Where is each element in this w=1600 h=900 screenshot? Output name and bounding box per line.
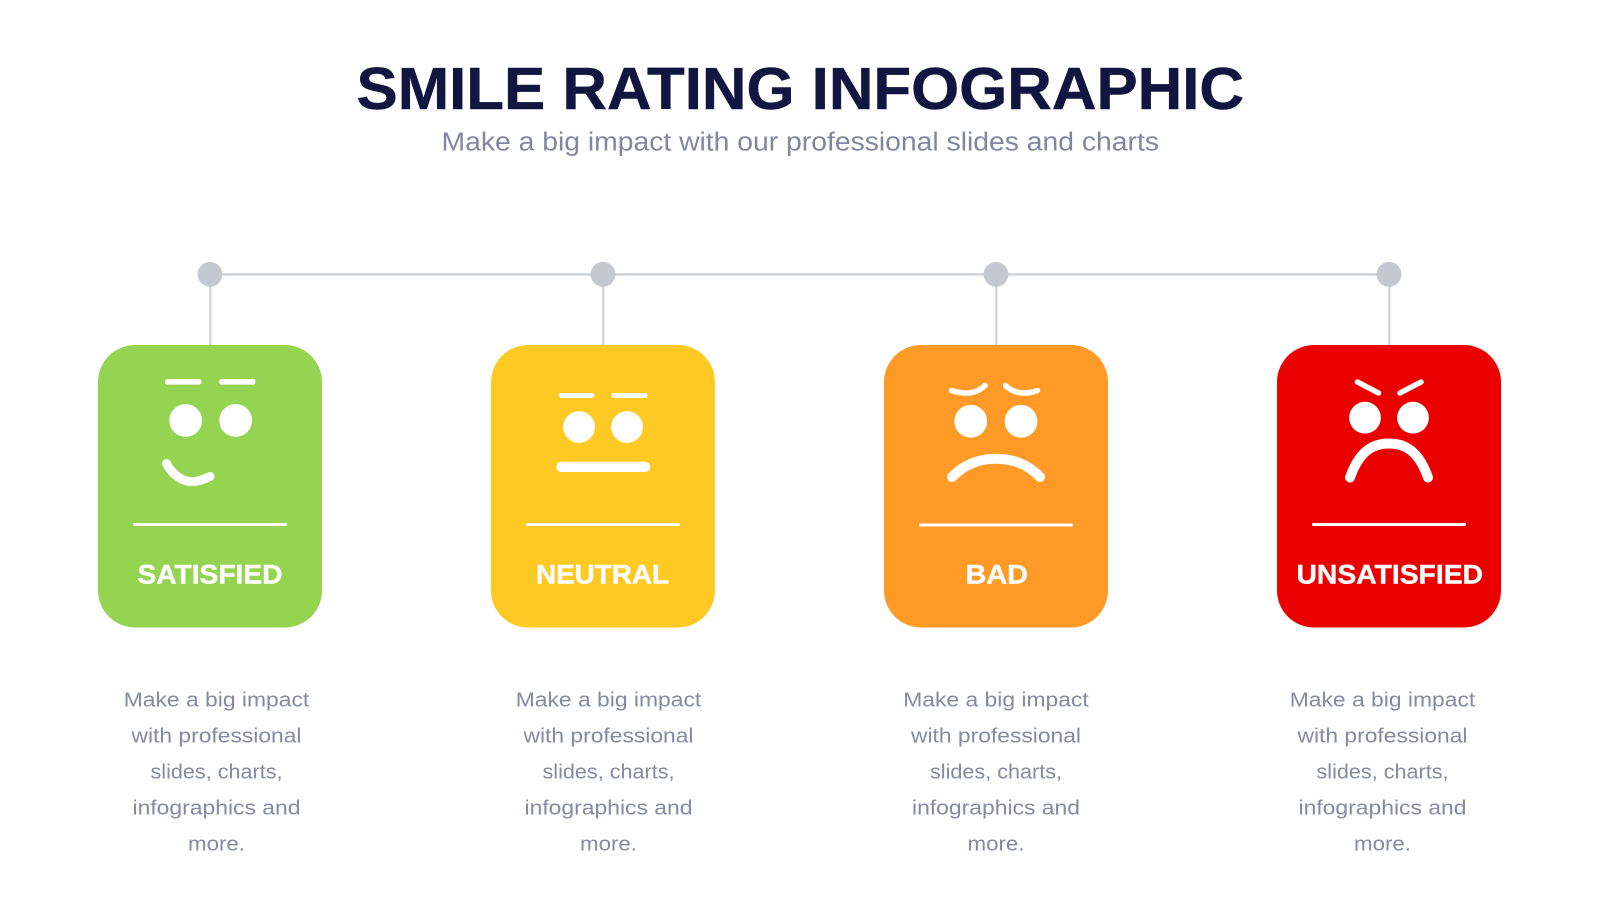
title: SMILE RATING INFOGRAPHIC <box>356 56 1244 122</box>
icon: neutral face <box>556 393 650 472</box>
text block: neutral: more. <box>580 832 637 856</box>
text block: neutral: slides, charts, <box>542 760 674 784</box>
icon: satisfied face <box>165 379 256 482</box>
timeline connector <box>198 262 1401 345</box>
text block: bad: Make a big impact <box>903 688 1089 712</box>
text block: bad: with professional <box>910 724 1081 748</box>
text block: neutral <box>516 688 702 856</box>
text block: unsatisfied: infographics and <box>1298 796 1466 820</box>
text block: satisfied: Make a big impact <box>124 688 310 712</box>
text block: bad <box>903 688 1089 856</box>
text block: unsatisfied: Make a big impact <box>1290 688 1476 712</box>
text block: satisfied: infographics and <box>132 796 300 820</box>
label: bad: BAD <box>966 560 1028 590</box>
text block: neutral: infographics and <box>524 796 692 820</box>
panel: satisfied <box>98 345 322 628</box>
subtitle: Make a big impact with our professional slides and charts <box>442 129 1159 157</box>
label: unsatisfied: UNSATISFIED <box>1296 560 1483 590</box>
text block: satisfied <box>124 688 310 856</box>
text block: satisfied: slides, charts, <box>150 760 282 784</box>
text block: satisfied: with professional <box>130 724 302 748</box>
text block: unsatisfied: slides, charts, <box>1316 760 1448 784</box>
label: neutral: NEUTRAL <box>536 560 669 590</box>
text block: bad: more. <box>968 832 1024 856</box>
text block: neutral: with professional <box>522 724 694 748</box>
text block: unsatisfied: more. <box>1354 832 1411 856</box>
text block: bad: infographics and <box>912 796 1080 820</box>
text block: unsatisfied: with professional <box>1296 724 1468 748</box>
panel: neutral <box>491 345 715 628</box>
text block: satisfied: more. <box>188 832 245 856</box>
panel: unsatisfied <box>1277 345 1501 628</box>
icon: bad face <box>952 386 1040 477</box>
text block: unsatisfied <box>1290 688 1476 856</box>
panel: bad <box>884 345 1108 628</box>
text block: neutral: Make a big impact <box>516 688 702 712</box>
text block: bad: slides, charts, <box>930 760 1062 784</box>
icon: unsatisfied face <box>1349 382 1429 478</box>
label: satisfied: SATISFIED <box>138 560 282 590</box>
